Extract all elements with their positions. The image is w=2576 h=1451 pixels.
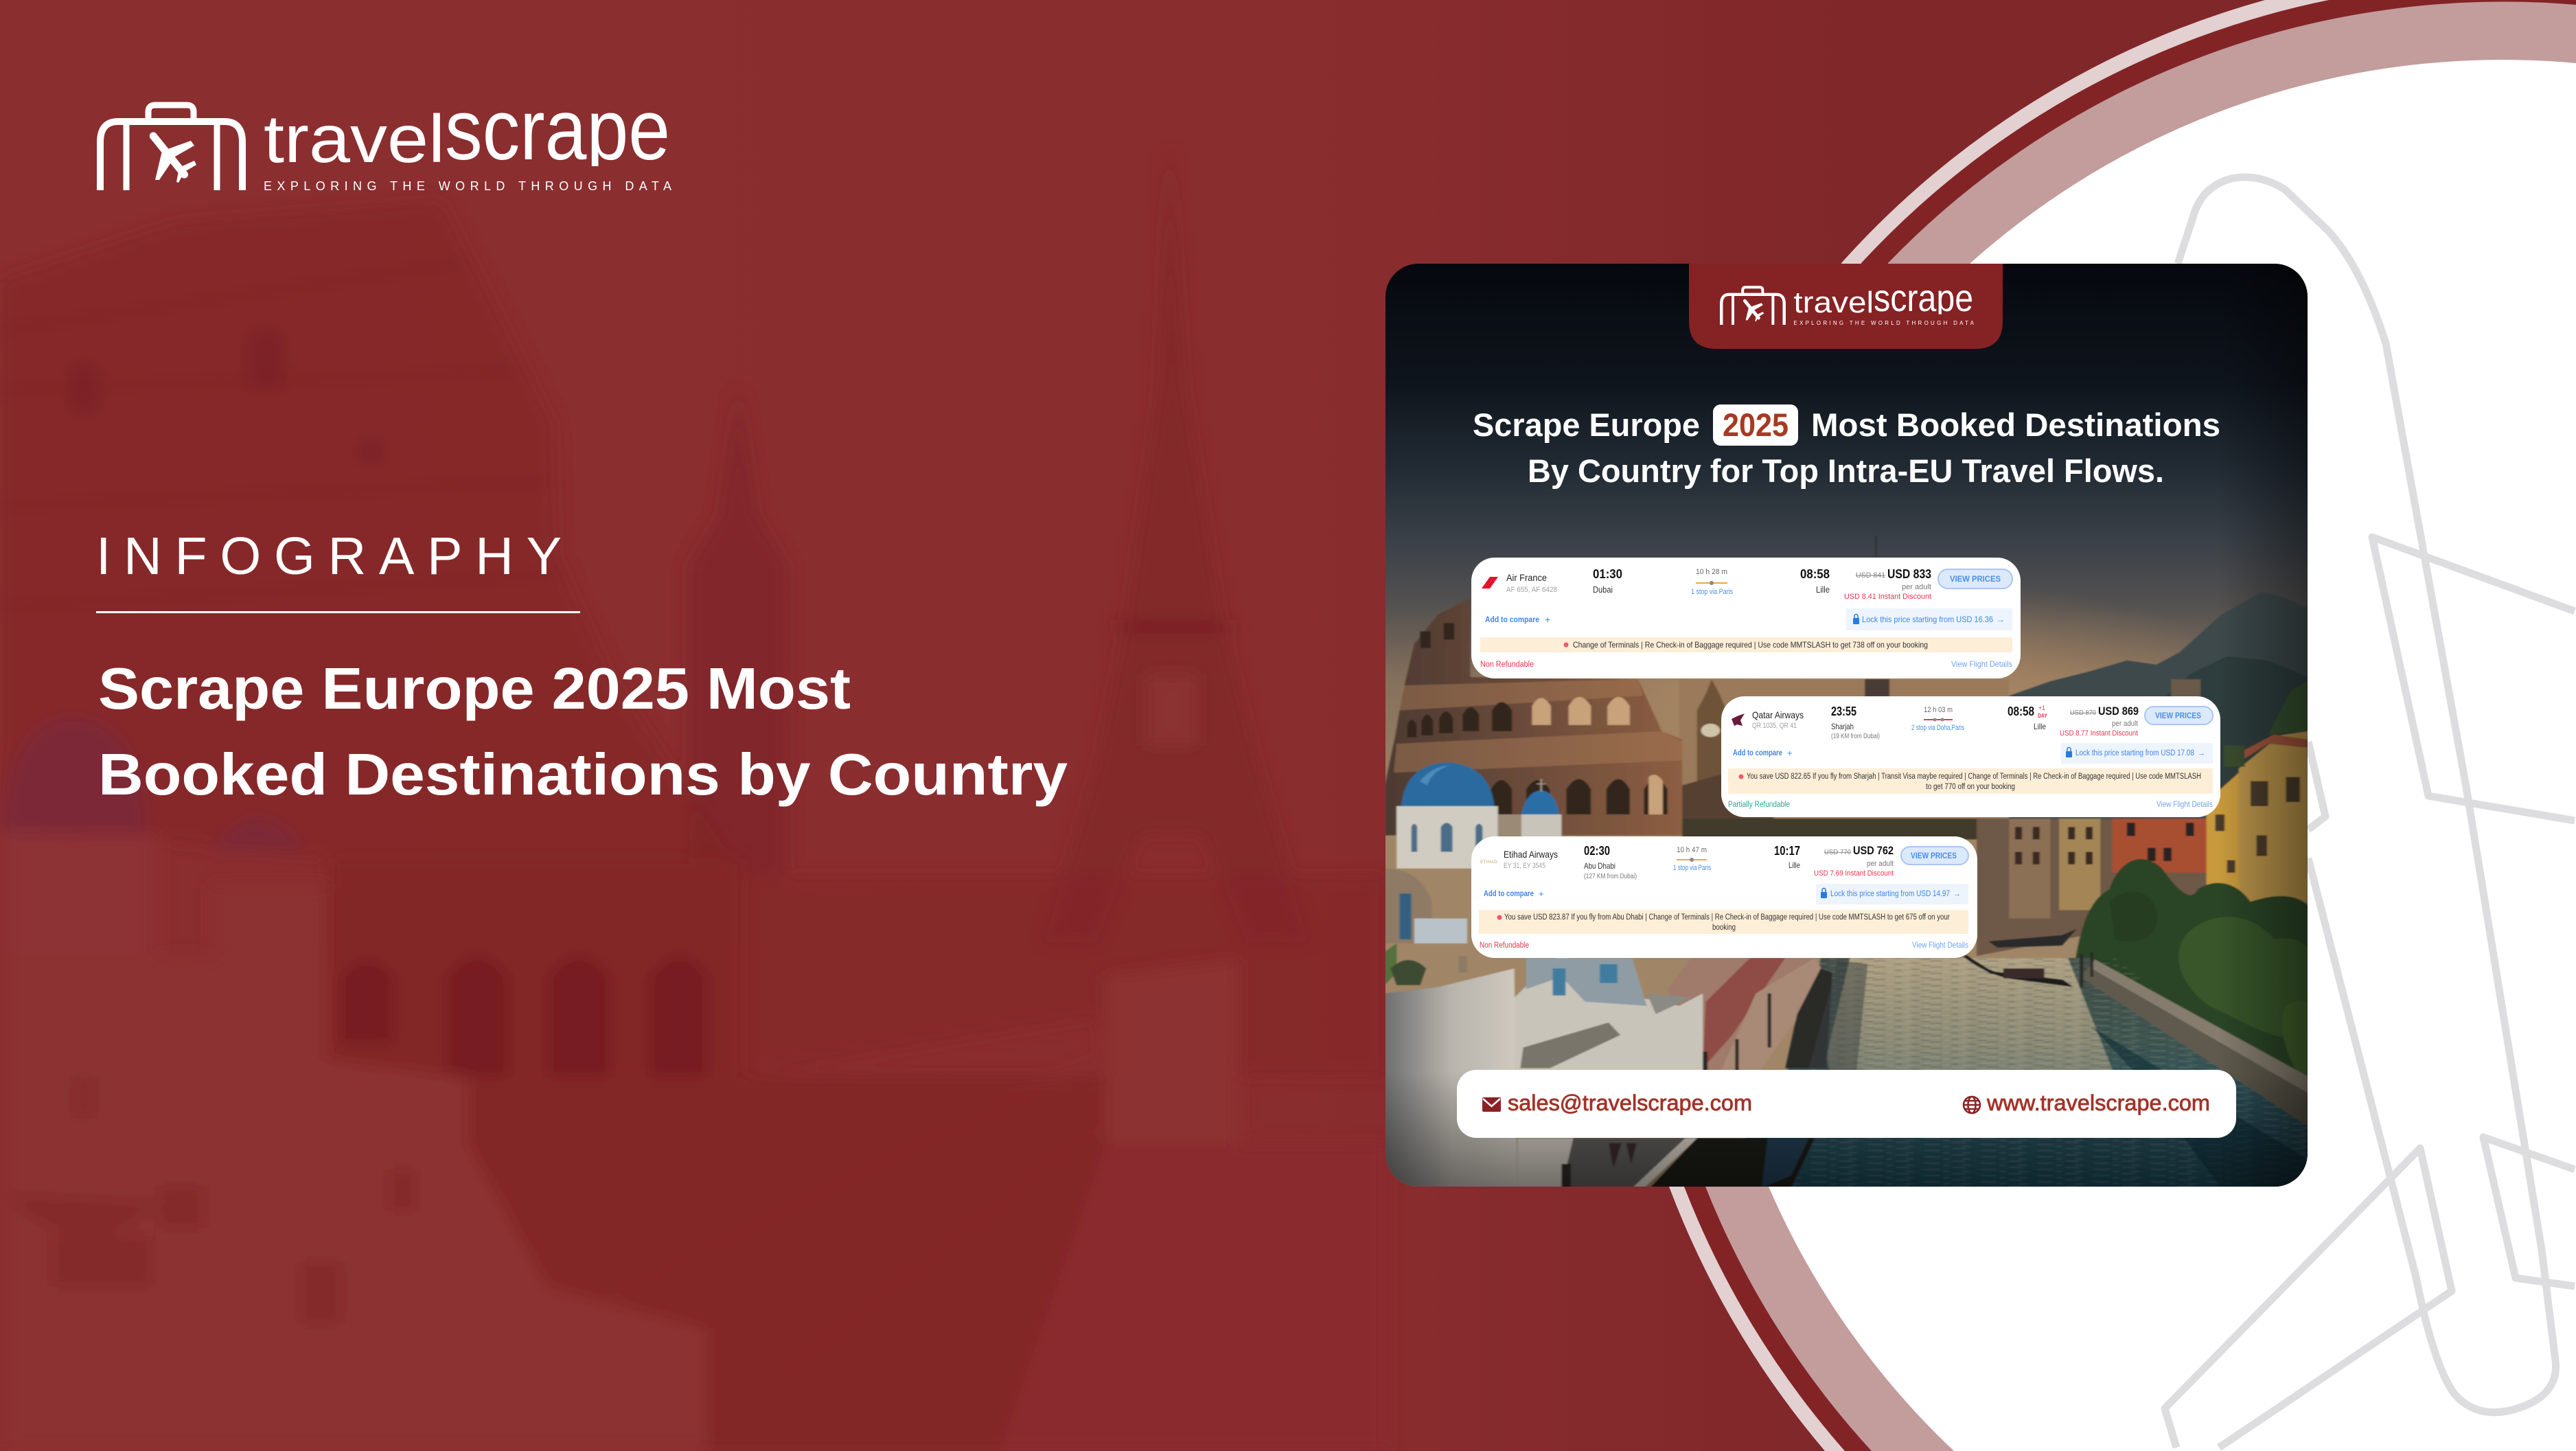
flight card: Air France: View Flight Details: [1951, 659, 2012, 669]
flight card: Etihad Airways: Add to compare: [1484, 889, 1534, 898]
lock price box: →: [2198, 749, 2205, 757]
flight card: Etihad Airways: (127 KM from Dubai): [1584, 873, 1637, 880]
logo tagline: EXPLORING THE WORLD THROUGH DATA: [264, 179, 671, 193]
flight card: Air France: 10 h 28 m: [1696, 568, 1727, 576]
flight card: Etihad Airways: Lille: [1789, 860, 1800, 870]
main logo: [100, 82, 671, 193]
flight card: Etihad Airways: 02:30: [1584, 844, 1610, 858]
flight card: Air France: +: [1545, 614, 1550, 625]
flight card: Air France: Add to compare: [1485, 615, 1539, 624]
route line: [1677, 858, 1707, 862]
flight card: Etihad Airways: Abu Dhabi: [1584, 861, 1615, 871]
poster logo: [1721, 277, 1975, 326]
flight card: Qatar Airways: USD 869: [2098, 705, 2139, 718]
divider line under label: [96, 611, 580, 613]
poster logo tab: [1689, 264, 2003, 349]
flight card: Air France: 1 stop via Paris: [1691, 588, 1733, 596]
flight card: Qatar Airways: Partially Refundable: [1728, 801, 1790, 809]
flight card: Etihad Airways: EY 31, EY 3545: [1504, 862, 1545, 870]
flight card: Qatar Airways: 12 h 03 m: [1924, 706, 1953, 714]
flight card: Qatar Airways: Qatar Airways: [1752, 709, 1804, 720]
note band: [1728, 768, 2213, 794]
flight card: Air France: AF 655, AF 6428: [1506, 586, 1557, 594]
icon: mail: [1482, 1097, 1501, 1112]
flight card: Air France: per adult: [1902, 583, 1931, 591]
label: INFOGRAPHY: INFOGRAPHY: [96, 527, 562, 586]
flight card: Qatar Airways: (19 KM from Dubai): [1831, 733, 1880, 740]
background: decorative circle bands and white area: [1669, 0, 2576, 1451]
icon: Air France logo: [1482, 577, 1498, 589]
flight card: Air France: Dubai: [1593, 584, 1613, 595]
button: view prices: VIEW PRICES: [1950, 574, 2001, 584]
flight card: Etihad Airways: USD 7.69 Instant Discount: [1814, 869, 1894, 878]
logo wordmark: scrape: [445, 82, 670, 178]
flight card: Etihad Airways: Non Refundable: [1480, 941, 1529, 950]
background: tinted landmark silhouettes: [0, 146, 1387, 1451]
contact bar: [1457, 1070, 2236, 1138]
flight card: Etihad Airways: 1 stop via Paris: [1673, 864, 1711, 872]
ghost airplane outline: [2165, 177, 2575, 1448]
note band: You save USD 823.87 If you fly from Abu Dhabi | Change of Terminals | Re Check-in of Baggage required | Use code MMTSLASH to get 675 off on your: [1504, 913, 1950, 922]
flight card: Air France: [1471, 558, 2021, 678]
flight card: Etihad Airways: Etihad Airways: [1504, 849, 1558, 860]
flight card: Etihad Airways: USD 770: [1824, 849, 1851, 856]
flight card: Qatar Airways: USD 8.77 Instant Discount: [2060, 729, 2138, 738]
flight card: Qatar Airways: USD 870: [2070, 709, 2096, 717]
flight card: Qatar Airways: Add to compare: [1733, 748, 1782, 757]
poster photo: vignette: [1385, 264, 2308, 1187]
icon: suitcase small: [1721, 287, 1784, 325]
poster headline: [1473, 404, 2220, 489]
note band: booking: [1712, 924, 1736, 932]
poster logo wordmark: travel: [1793, 286, 1874, 319]
poster headline: Most Booked Destinations: [1811, 407, 2220, 443]
flight card: Etihad Airways: 10:17: [1774, 844, 1800, 858]
flight card: Qatar Airways: 23:55: [1831, 705, 1856, 718]
poster photo: European landmarks scene: [1385, 536, 2308, 1188]
flight card: Qatar Airways: View Flight Details: [2157, 799, 2213, 809]
lock price box: Lock this price starting from USD 16.36: [1862, 615, 1993, 624]
flight card: Qatar Airways: Lille: [2034, 722, 2046, 731]
flight card: Qatar Airways: +1: [2038, 705, 2045, 711]
lock price box: [1816, 884, 1968, 904]
note band: You save USD 822.65 If you fly from Sharjah | Transit Visa maybe required | Change of Terminals | Re Check-in of Baggage required | Use code MMTSLASH: [1747, 773, 2201, 781]
flight card: Etihad Airways: USD 762: [1853, 844, 1894, 857]
year badge: 2025: [1723, 407, 1789, 443]
button: view prices: VIEW PRICES: [1911, 852, 1957, 860]
button: view prices: [1938, 569, 2012, 589]
flight card: Air France: USD 8.41 Instant Discount: [1844, 593, 1931, 601]
lock price box: Lock this price starting from USD 17.08: [2075, 749, 2194, 757]
icon: Etihad logo: ETIHAD: [1480, 860, 1497, 865]
flight card: Qatar Airways: QR 1035, QR 41: [1752, 722, 1797, 730]
contact bar: www.travelscrape.com: [1986, 1090, 2210, 1115]
note band: [1479, 910, 1968, 934]
poster logo tagline: EXPLORING THE WORLD THROUGH DATA: [1793, 320, 1975, 326]
flight card: Air France: Lille: [1816, 584, 1830, 595]
flight card: Etihad Airways: [1471, 836, 1977, 958]
flight card: Air France: USD 841: [1856, 571, 1885, 580]
poster logo wordmark: scrape: [1874, 277, 1973, 319]
logo wordmark: travel: [264, 101, 445, 176]
lock price box: Lock this price starting from USD 14.97: [1830, 890, 1950, 898]
flight card: Air France: USD 833: [1887, 567, 1931, 581]
flight card: Etihad Airways: View Flight Details: [1912, 940, 1968, 950]
contact bar: sales@travelscrape.com: [1508, 1090, 1752, 1115]
flight card: Qatar Airways: per adult: [2112, 720, 2138, 728]
flight card: Etihad Airways: 10 h 47 m: [1677, 846, 1707, 854]
note band: Change of Terminals | Re Check-in of Baggage required | Use code MMTSLASH to get 738 off on your booking: [1573, 640, 1928, 650]
main title: Booked Destinations by Country: [98, 742, 1068, 808]
logo wordmark: [265, 113, 667, 166]
flight card: Air France: 01:30: [1593, 567, 1622, 581]
flight card: Etihad Airways: +: [1539, 889, 1544, 899]
flight card: Qatar Airways: 2 stop via Doha,Paris: [1911, 724, 1964, 732]
poster photo: sky: [1385, 264, 2308, 1187]
flight card: Air France: Non Refundable: [1480, 661, 1534, 669]
flight card: Air France: Air France: [1506, 572, 1547, 583]
flight card: Air France: 08:58: [1800, 567, 1830, 581]
lock price box: →: [1953, 890, 1961, 898]
flight card: Qatar Airways: [1721, 696, 2220, 817]
main title: [98, 656, 1068, 808]
flight card: Qatar Airways: DAY: [2038, 713, 2048, 719]
icon: globe: [1964, 1097, 1980, 1113]
flight card: Qatar Airways: Sharjah: [1831, 722, 1854, 731]
lock price box: →: [1997, 615, 2005, 624]
main title: Scrape Europe 2025 Most: [98, 656, 851, 722]
poster headline: By Country for Top Intra-EU Travel Flows.: [1528, 453, 2164, 489]
route line: [1924, 718, 1953, 721]
lock price box: [1846, 608, 2012, 630]
flight card: Etihad Airways: per adult: [1867, 860, 1894, 868]
note band: to get 770 off on your booking: [1926, 783, 2015, 791]
flight card: Qatar Airways: +: [1787, 748, 1793, 758]
button: view prices: [2145, 707, 2213, 724]
button: view prices: VIEW PRICES: [2155, 712, 2201, 720]
panel: poster: [1385, 264, 2308, 1188]
poster headline: Scrape Europe: [1473, 407, 1700, 443]
note band: [1480, 637, 2012, 652]
icon: suitcase with plane: [100, 105, 242, 190]
flight card: Qatar Airways: 08:58: [2008, 705, 2034, 718]
icon: Qatar Airways logo: [1732, 713, 1745, 726]
lock price box: [2061, 743, 2213, 764]
button: view prices: [1901, 847, 1968, 865]
poster logo wordmark: [1793, 277, 1973, 319]
route line: [1696, 581, 1727, 585]
